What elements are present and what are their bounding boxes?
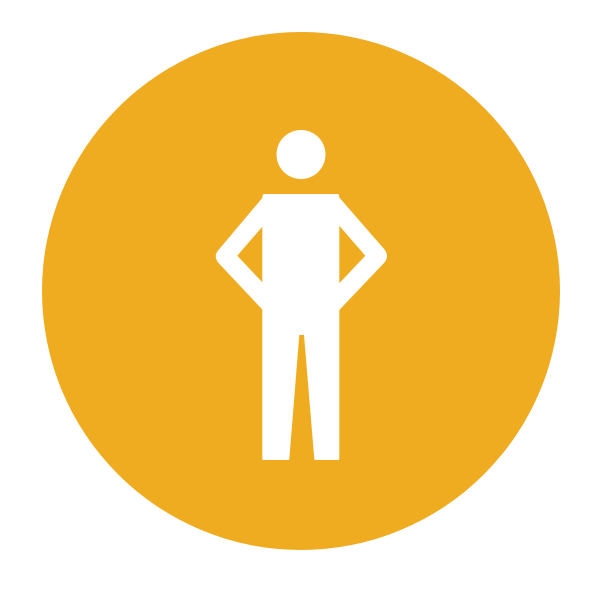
orange circle background xyxy=(42,32,560,550)
body with arms and legs xyxy=(216,194,387,460)
figure: standing person xyxy=(216,130,387,460)
head xyxy=(276,130,326,179)
